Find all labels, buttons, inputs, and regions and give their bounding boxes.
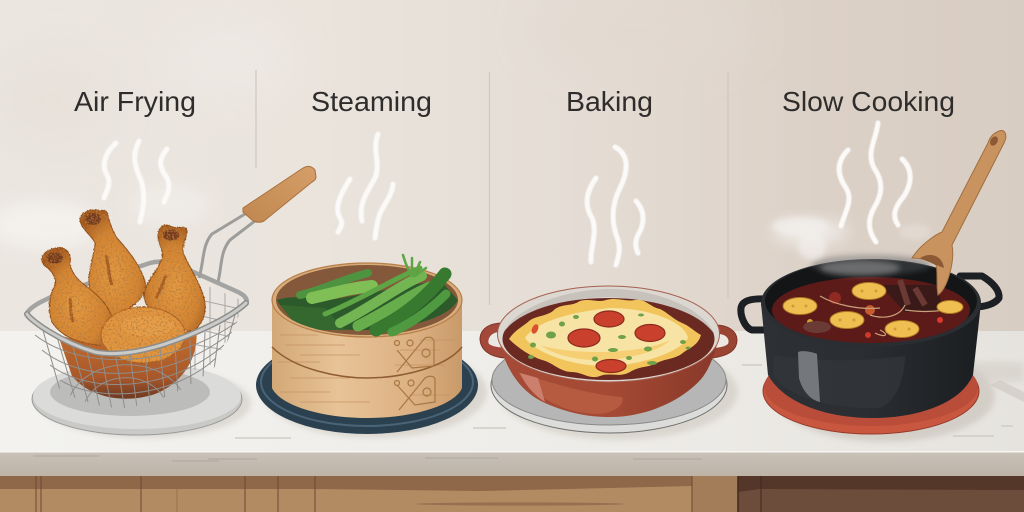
counter top <box>0 331 1024 453</box>
steamer body <box>272 300 462 418</box>
basket handle <box>243 166 316 222</box>
pot rim and interior <box>761 255 981 347</box>
pot handles <box>741 276 999 330</box>
wooden spoon <box>912 131 1006 295</box>
counter <box>0 331 1024 512</box>
pepperoni slices <box>568 311 665 372</box>
wooden cabinet <box>0 476 1024 512</box>
title: Steaming: Steaming <box>311 86 432 117</box>
plate under dish <box>491 335 738 440</box>
basket front rim <box>27 303 246 354</box>
dark plate <box>256 336 487 438</box>
pot highlights <box>773 351 905 408</box>
plate under basket <box>32 363 251 438</box>
basket front wire mesh <box>35 315 240 410</box>
illustration: baked casserole dish <box>480 286 738 440</box>
dish rim <box>498 286 720 382</box>
illustration: air fryer basket with chicken <box>27 166 316 438</box>
basket back rim <box>27 262 247 313</box>
dish body <box>499 340 718 417</box>
steamer rim and interior <box>272 263 462 337</box>
dish highlight <box>518 372 623 414</box>
red trivet <box>763 348 995 442</box>
steam lines: steaming <box>338 134 393 238</box>
steam lines: air frying <box>104 141 169 222</box>
dish interior sauce <box>502 298 714 380</box>
illustration: slow cooking pot with stew <box>741 131 1006 442</box>
dish handles <box>480 323 737 358</box>
drumstick right <box>144 225 205 331</box>
herb flecks <box>528 314 690 365</box>
stew <box>772 277 970 343</box>
steamer tier line <box>272 347 462 378</box>
steamer clasps <box>394 337 435 410</box>
steam lines: slow cooking <box>839 123 910 242</box>
drumstick left <box>42 248 112 345</box>
title: Slow Cooking: Slow Cooking <box>782 86 955 117</box>
stew vegetable slices <box>783 282 963 338</box>
basket back wires <box>194 286 238 370</box>
pot body <box>761 303 981 418</box>
counter shadow areas and scratches <box>33 362 1024 461</box>
drumstick center <box>80 210 146 318</box>
round chicken piece <box>101 307 185 363</box>
background wall <box>0 0 1024 340</box>
counter front edge <box>0 452 1024 476</box>
title: Air Frying: Air Frying <box>74 86 196 117</box>
dividers <box>256 70 728 305</box>
greens <box>277 280 458 330</box>
lower chicken seen through the basket <box>58 326 197 399</box>
steam lines: baking <box>587 147 643 265</box>
rising steam from pot <box>772 217 931 276</box>
illustration: bamboo steamer with greens <box>256 255 487 438</box>
title: Baking: Baking <box>566 86 653 117</box>
handle wires <box>199 211 260 282</box>
melted cheese topping <box>509 299 701 377</box>
